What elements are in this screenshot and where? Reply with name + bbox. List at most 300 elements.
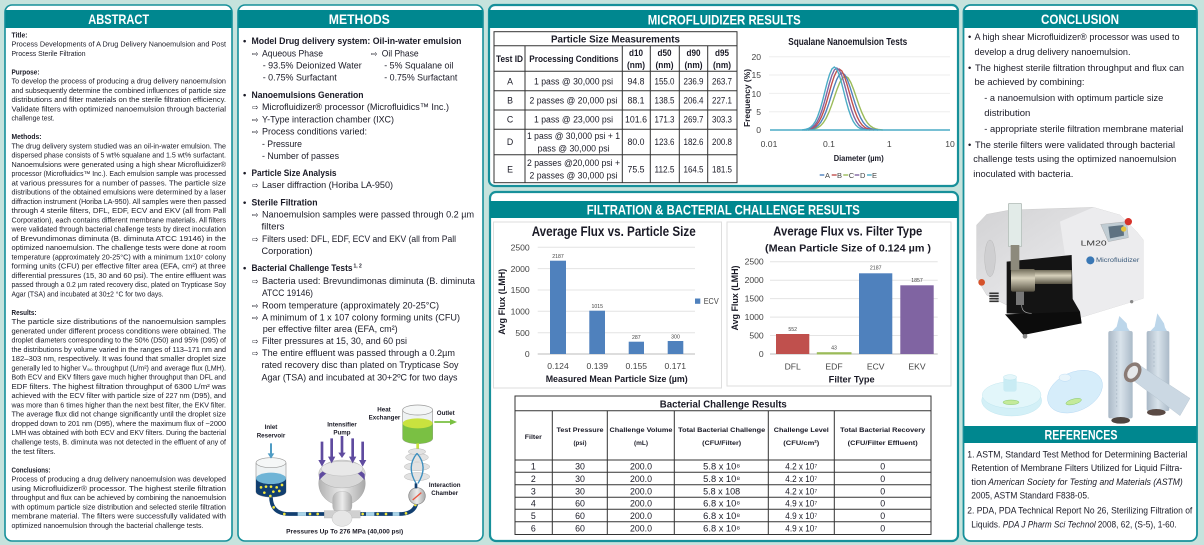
text block: methods list: - Number of passes	[262, 150, 339, 161]
text block: methods list: Model Drug delivery system: Oil-in-water emulsion	[252, 35, 462, 46]
text block: methods list: Nanoemulsion samples were passed through 0.2 µm	[262, 208, 474, 220]
chart legend: D	[860, 171, 866, 180]
text block: methods list: Oil Phase	[382, 48, 419, 58]
text block: conclusion bullets: challenge tests using the optimized nanoemulsion	[973, 153, 1176, 164]
chart: average flux vs particle size: 1015	[592, 304, 603, 310]
chart: average flux vs particle size: 500	[515, 328, 530, 338]
table: particle size measurements: 303.3	[712, 114, 732, 124]
chart: average flux vs filter type: Avg Flux (LMH)	[730, 266, 740, 330]
text block: abstract body: differential pressures (15, 30 and 60 psi). The entire effluent was	[12, 273, 227, 280]
text block: methods list: ⇨	[252, 235, 259, 244]
text block: abstract body: diffraction instrument (Horiba LA-950). All samples were then passed	[12, 199, 226, 206]
text block: methods list: Sterile Filtration	[252, 196, 318, 208]
panel: abstract	[5, 5, 232, 541]
text block: references: Liquids.	[971, 520, 1000, 530]
text block: abstract body: at various pressures for a number of passes. The particle size	[12, 180, 226, 187]
text block: abstract body: optimized nanoemulsion. The challenge tests were done at room	[12, 245, 226, 252]
table: bacterial challenge results: (mL)	[634, 440, 648, 447]
table: particle size measurements	[494, 32, 737, 183]
chart: squalane nanoemulsion tests	[743, 36, 955, 180]
table: bacterial challenge results: 0	[880, 524, 885, 534]
text block: conclusion bullets: The sterile filters were validated through bacterial	[975, 139, 1175, 150]
text block: methods list: ⇨	[252, 349, 259, 358]
text block: methods list: - 0.75% Surfactant	[263, 72, 337, 82]
text block: abstract body: EDF filters. The highest filtration throughput of 6300 L/m² was	[12, 384, 227, 391]
table: particle size measurements: 181.5	[712, 164, 732, 174]
text block: abstract body: and subsequently determine the combined influences of particle size	[12, 88, 226, 95]
text block: methods list: - 5% Squalane oil	[384, 60, 453, 70]
table: bacterial challenge results: 0	[880, 511, 885, 521]
chart: average flux vs filter type: DFL	[785, 361, 801, 371]
table: bacterial challenge results: 4.2 x 10⁷	[785, 486, 817, 496]
chart: average flux vs particle size: Measured Mean Particle Size (µm)	[546, 374, 688, 384]
table: particle size measurements: 263.7	[712, 76, 732, 86]
image: filter capsules and cartridges	[982, 313, 1190, 424]
text block: methods list: ⇨	[252, 210, 259, 220]
text block: methods list: Corporation)	[262, 245, 312, 256]
table: bacterial challenge results: 0	[880, 461, 885, 471]
text block: methods list: Bacteria used: Brevundimonas diminuta (B. diminuta	[262, 275, 476, 286]
text block: references: American Society for Testing and Materials (ASTM)	[987, 477, 1183, 487]
text block: abstract body: The particle size distributions of the nanoemulsion samples	[12, 319, 227, 326]
heading: methods: METHODS	[329, 11, 390, 27]
text block: references	[967, 450, 1193, 530]
text block: methods list: •	[243, 262, 246, 273]
text block: conclusion bullets: - a nanoemulsion with optimum particle size	[984, 92, 1163, 103]
chart: average flux vs particle size: 287	[632, 335, 641, 341]
text block: methods list: Nanoemulsions Generation	[252, 89, 364, 100]
text block: abstract body: Conclusions:	[12, 467, 50, 474]
table: particle size measurements: 112.5	[654, 164, 675, 174]
panel: filtration and bacterial challenge results	[490, 192, 958, 541]
text block: methods list: ⇨	[252, 50, 259, 58]
text block: abstract body: LMH was obtained with both ECV and EKV filters. During the bacterial	[12, 430, 226, 437]
table: bacterial challenge results: Total Bacterial Challenge	[678, 427, 765, 434]
chart: squalane nanoemulsion tests: 5	[756, 107, 761, 117]
text block: methods list: Particle Size Analysis	[252, 167, 336, 178]
table: particle size measurements: 164.5	[684, 164, 704, 174]
text block: conclusion bullets: develop a drug delivery nanoemulsion.	[974, 46, 1130, 57]
label: outlet: Outlet	[437, 410, 455, 417]
table: particle size measurements: 2 passes @20,000 psi +	[527, 158, 620, 168]
table: bacterial challenge results: 60	[575, 499, 585, 509]
table: bacterial challenge results: 4.9 x 10⁷	[785, 524, 817, 534]
text block: abstract body: optimized nanoemulsion through the bacterial challenge tests.	[12, 523, 204, 530]
chart: average flux vs particle size: 1500	[511, 285, 530, 295]
table: particle size measurements: (nm)	[713, 60, 731, 70]
table: particle size measurements: d50	[658, 48, 672, 58]
text block: references: 1. ASTM, Standard Test Method for Determining Bacterial	[967, 450, 1187, 460]
table: bacterial challenge results: 4.2 x 10⁷	[785, 461, 817, 471]
label: chamber: Chamber	[431, 490, 459, 497]
chart: average flux vs filter type	[727, 222, 951, 386]
chart: average flux vs particle size: 300	[671, 335, 680, 341]
text block: abstract body: passed through a 0.2 µm rated recovery disc, plated on Trypticase Soy	[12, 282, 226, 289]
table: bacterial challenge results: 200.0	[630, 486, 652, 496]
text block: abstract body: distributions and filter materials on the sterile filtration efficiency.	[12, 97, 226, 104]
chart: squalane nanoemulsion tests: 20	[751, 52, 761, 62]
label: pressures: Pressures Up To 276 MPa (40,000 psi)	[286, 528, 403, 536]
chart: squalane nanoemulsion tests: 0.1	[823, 139, 835, 149]
image: microfluidizer machine	[977, 203, 1143, 339]
table: particle size measurements: 88.1	[628, 96, 645, 106]
text block: abstract body: achieved with the ECV filter with particle size of 227 nm (D95), and	[12, 393, 226, 400]
chart: average flux vs filter type: ECV	[867, 361, 885, 371]
text block: methods list: - 93.5% Deionized Water	[263, 60, 362, 70]
table: bacterial challenge results: 3	[531, 486, 536, 496]
text block: abstract body: The drug delivery system studied was an oil-in-water emulsion. The	[12, 143, 226, 150]
table: bacterial challenge results: 6.8 x 10⁸	[703, 511, 741, 521]
chart: average flux vs filter type: 2187	[870, 266, 882, 272]
text block: methods list: Aqueous Phase	[262, 48, 323, 58]
table: bacterial challenge results: 0	[880, 486, 885, 496]
text block: abstract body: droplet diameters corresponding to the 50% (D50) and 95% (D95) of	[12, 338, 226, 345]
text block: methods list: Filters used: DFL, EDF, ECV and EKV (all from Pall	[262, 233, 456, 244]
chart: average flux vs particle size: ECV	[704, 296, 719, 306]
chart: average flux vs filter type: (Mean Particle Size of 0.124 µm )	[765, 242, 931, 254]
text block: conclusion bullets: •	[968, 62, 971, 73]
text block: methods list: ⇨	[252, 302, 259, 310]
text block: methods list: Filter pressures at 15, 30, and 60 psi	[262, 335, 407, 346]
table: bacterial challenge results: 1	[531, 461, 536, 471]
table: bacterial challenge results: Test Pressure	[556, 427, 604, 434]
text block: conclusion bullets	[968, 31, 1184, 179]
chart: average flux vs particle size: Average Flux vs. Particle Size	[532, 224, 696, 239]
text block: abstract body: Results:	[12, 310, 36, 317]
text block: methods list: per effective filter area (EFA, cm²)	[263, 323, 398, 334]
table: particle size measurements: Particle Size Measurements	[551, 34, 680, 45]
chart: average flux vs particle size: 0.139	[587, 361, 608, 371]
text block: methods list: 1, 2	[354, 264, 362, 270]
chart: average flux vs particle size: 0	[525, 349, 530, 359]
table: particle size measurements: 101.6	[625, 114, 647, 124]
table: particle size measurements: d90	[686, 48, 701, 58]
table: bacterial challenge results: 30	[575, 461, 585, 471]
table: bacterial challenge results: 5.8 x 10⁸	[703, 461, 741, 471]
text block: abstract body: Process of producing a drug delivery nanoemulsion was developed	[12, 476, 226, 484]
chart: average flux vs particle size: 1000	[511, 306, 530, 316]
text block: abstract body: challenge tests, B. diminuta was not detected in the effluent of any of	[12, 440, 226, 446]
text block: methods list: ⇨	[252, 314, 259, 322]
text block: abstract body: To develop the process of producing a drug delivery nanoemulsion	[12, 79, 226, 86]
text block: conclusion bullets: The highest sterile filtration throughput and flux can	[975, 62, 1184, 73]
table: bacterial challenge results: 200.0	[630, 474, 652, 484]
table: particle size measurements: d10	[629, 48, 643, 58]
text block: methods list: ⇨	[252, 103, 259, 112]
text block: abstract body: Purpose:	[12, 69, 40, 76]
text block: abstract body: generally led to higher V₉₀ throughput (L/m²) and average flux (LMH).	[12, 366, 226, 372]
chart legend	[820, 171, 877, 180]
label: Microfluidizer logo: Microfluidizer	[1096, 258, 1139, 264]
table: particle size measurements: (nm)	[656, 60, 674, 70]
label: LM20: LM20	[1081, 238, 1107, 247]
table: particle size measurements: 2 passes @ 20,000 psi	[530, 96, 618, 106]
table: bacterial challenge results: Total Bacterial Recovery	[840, 427, 925, 434]
table: particle size measurements: 75.5	[628, 164, 645, 174]
text block: abstract body: Corporation), each contains different membrane materials. All filters	[12, 217, 227, 224]
text block: abstract body: the distributions by volume varied in the ranges of 113–171 nm and	[12, 347, 226, 354]
text block: methods list: •	[243, 167, 246, 178]
table: particle size measurements: 200.8	[712, 137, 732, 147]
table: bacterial challenge results: Challenge Level	[774, 427, 829, 434]
chart: average flux vs filter type: EKV	[908, 361, 926, 371]
chart: squalane nanoemulsion tests: 10	[945, 139, 955, 149]
chart legend: E	[872, 171, 877, 180]
text block: methods list: ⇨	[252, 128, 259, 136]
text block: methods list: ATCC 19146)	[262, 287, 313, 298]
chart: average flux vs filter type: 1500	[745, 294, 764, 304]
table: bacterial challenge results: 0	[880, 474, 885, 484]
table: bacterial challenge results: 2	[531, 474, 536, 484]
text block: abstract body	[10, 32, 227, 530]
table: bacterial challenge results: 200.0	[630, 461, 652, 471]
text block: abstract body: Title:	[12, 32, 28, 39]
table: bacterial challenge results: 200.0	[630, 499, 652, 509]
chart legend: B	[837, 171, 842, 180]
table: particle size measurements: 1 pass @ 30,000 psi	[534, 76, 613, 86]
chart: average flux vs particle size: 0.171	[665, 361, 686, 371]
text block: abstract body: was more than 6 times higher than the next best filter, the EKV filter.	[10, 402, 226, 410]
table: bacterial challenge results: 200.0	[630, 511, 652, 521]
heading: filtration results: FILTRATION & BACTERIAL CHALLENGE RESULTS	[587, 202, 860, 218]
chart: average flux vs particle size: 0.124	[547, 361, 569, 371]
label: intensifier pump: Intensifier	[327, 422, 357, 428]
text block: methods list: ⇨	[252, 337, 259, 346]
table: particle size measurements: 269.7	[684, 114, 704, 124]
text block: abstract body: Both ECV and EKV filters gave much higher throughput than DFL and	[12, 375, 226, 382]
table: particle size measurements: 182.6	[684, 137, 704, 147]
chart: average flux vs filter type: 43	[831, 346, 837, 352]
text block: references: tion	[971, 477, 986, 487]
table: particle size measurements: B	[507, 96, 513, 106]
chart: average flux vs filter type: 500	[749, 330, 764, 340]
chart: squalane nanoemulsion tests: 15	[751, 70, 761, 80]
text block: abstract body: using Microfluidizer® processor. The highest sterile filtration	[12, 485, 226, 493]
text block: methods list: - Pressure	[262, 138, 302, 149]
label: interaction: Interaction	[429, 482, 461, 489]
text block: abstract body: Methods:	[12, 134, 42, 141]
text block: abstract body: challenge test.	[12, 116, 55, 123]
table: particle size measurements: 138.5	[654, 96, 675, 106]
text block: abstract body: Agar (TSA) and incubated at 30±2 °C for two days.	[12, 290, 164, 298]
text block: conclusion bullets: distribution	[984, 107, 1030, 118]
diagram: microfluidizer process	[256, 405, 461, 536]
text block: methods list: rated recovery disc than plated on Trypticase Soy	[262, 359, 459, 370]
chart: average flux vs filter type: Average Flux vs. Filter Type	[773, 224, 922, 238]
table: particle size measurements: pass @ 30,000 psi	[538, 144, 610, 154]
chart: squalane nanoemulsion tests: 1	[887, 139, 892, 149]
table: particle size measurements: 236.9	[684, 76, 704, 86]
text block: methods list: •	[243, 89, 246, 100]
text block: methods list: Y-Type interaction chamber (IXC)	[262, 114, 394, 124]
text block: conclusion bullets: be achieved by combining:	[974, 76, 1084, 87]
text block: methods list: Bacterial Challenge Tests	[252, 262, 352, 273]
table: bacterial challenge results: 6	[531, 524, 536, 534]
text block: methods list: ⇨	[252, 116, 259, 124]
text block: methods list: Laser diffraction (Horiba LA-950)	[262, 179, 393, 190]
text block: abstract body: temperature (approximately 20-25°C) with a minimum 1x10⁷ colony	[12, 253, 227, 261]
table: particle size measurements: 80.0	[628, 137, 645, 147]
table: particle size measurements: A	[507, 76, 513, 86]
table: bacterial challenge results: Bacterial Challenge Results	[660, 399, 787, 410]
table: bacterial challenge results: 30	[575, 474, 585, 484]
chart: squalane nanoemulsion tests: 0	[756, 125, 761, 135]
table: particle size measurements: 123.6	[654, 137, 675, 147]
chart: average flux vs particle size: 2187	[552, 254, 564, 260]
text block: abstract body: of Brevundimonas diminuta (B. diminuta ATCC 19146) in the	[12, 236, 226, 243]
text block: abstract body: throughput and flux can be achieved by combining the nanoemulsion	[12, 495, 226, 502]
text block: abstract body: generated under different process conditions were obtained. The	[12, 328, 226, 335]
text block: abstract body: the test filters.	[12, 449, 56, 456]
chart: average flux vs filter type: 0	[759, 349, 764, 359]
table: particle size measurements: E	[507, 164, 513, 174]
text block: methods list: ⇨	[252, 277, 259, 286]
table: particle size measurements: 227.1	[712, 96, 732, 106]
chart: squalane nanoemulsion tests: Diameter (µm)	[834, 154, 884, 163]
table: particle size measurements: 171.3	[654, 114, 675, 124]
text block: methods list: Microfluidizer® processor (Microfluidics™ Inc.)	[262, 101, 449, 112]
table: bacterial challenge results: 4.2 x 10⁷	[785, 474, 817, 484]
label: pump: Pump	[333, 430, 351, 436]
text block: abstract body: with optimum particle size distribution and selected sterile filtration	[10, 504, 226, 511]
text block: methods list: •	[243, 35, 246, 46]
table: bacterial challenge results: 5	[531, 511, 536, 521]
text block: abstract body: 182–303 nm, respectively. It was found that smaller droplet size	[12, 356, 226, 363]
text block: abstract body: Process Sterile Filtration	[12, 51, 86, 58]
table: particle size measurements: Test ID	[496, 54, 523, 64]
table: bacterial challenge results: 30	[575, 486, 585, 496]
heading: references	[964, 426, 1196, 443]
text block: abstract body: processor (Microfluidics™ Inc.). Each emulsion sample was processed	[12, 171, 226, 178]
panel: conclusion and references	[964, 5, 1197, 541]
table: bacterial challenge results: (psi)	[574, 440, 586, 447]
table: bacterial challenge results: 4	[531, 499, 536, 509]
chart: average flux vs particle size: 2500	[511, 242, 530, 252]
table: bacterial challenge results: 4.9 x 10⁷	[785, 511, 817, 521]
text block: abstract body: were validated through bacterial challenge tests by direct inoculation	[10, 227, 226, 234]
text block: methods list: •	[243, 196, 246, 208]
chart: squalane nanoemulsion tests: Frequency (%)	[743, 69, 752, 127]
table: particle size measurements: (nm)	[684, 60, 703, 70]
table: particle size measurements: 1 pass @ 30,000 psi + 1	[527, 131, 620, 141]
table: bacterial challenge results: 5.8 x 10⁸	[703, 474, 741, 484]
table: bacterial challenge results: 4.9 x 10⁷	[785, 499, 817, 509]
panel: methods	[238, 5, 483, 541]
text block: methods list: filters	[262, 220, 285, 232]
chart: squalane nanoemulsion tests: 0.01	[761, 139, 778, 149]
table: particle size measurements: 94.8	[628, 76, 645, 86]
table: particle size measurements: 1 pass @ 23,000 psi	[534, 114, 613, 124]
table: bacterial challenge results: (CFU/cm²)	[783, 440, 819, 447]
text block: abstract body: membrane material. The filters were successfully validated with	[12, 514, 226, 520]
chart: average flux vs filter type: 1000	[745, 312, 764, 322]
table: particle size measurements: 206.4	[684, 96, 704, 106]
chart: average flux vs filter type: Filter Type	[829, 374, 875, 384]
table: bacterial challenge results: Challenge Volume	[610, 427, 673, 434]
table: bacterial challenge results: Filter	[525, 434, 542, 441]
text block: conclusion bullets: A high shear Microfluidizer® processor was used to	[974, 31, 1180, 42]
panel: microfluidizer results	[489, 5, 958, 186]
chart: average flux vs filter type: 2000	[745, 275, 764, 285]
text block: references: PDA J Pharm Sci Technol	[1003, 520, 1097, 530]
table: bacterial challenge results: 6.8 x 10⁸	[703, 499, 741, 509]
heading: references: REFERENCES	[1044, 426, 1118, 442]
text block: methods list: Agar (TSA) and incubated at 30+2ºC for two days	[262, 372, 458, 382]
text block: methods list: Process conditions varied:	[262, 126, 367, 136]
text block: abstract body: Process Developments of A Drug Delivery Nanoemulsion and Post	[12, 42, 226, 49]
chart: average flux vs filter type: 552	[788, 327, 797, 333]
table: bacterial challenge results	[515, 396, 931, 534]
text block: abstract body: forming units (CFU) per effective filter area (EFA, cm²) at three	[12, 264, 226, 271]
label: inlet reservoir: Inlet	[265, 424, 277, 431]
heading: microfluidizer results: MICROFLUIDIZER RESULTS	[648, 12, 801, 28]
table: bacterial challenge results: (CFU/Filter Effluent)	[848, 440, 918, 447]
text block: methods list: - 0.75% Surfactant	[384, 72, 458, 82]
text block: abstract body: Nanoemulsions were generated using a high shear Microfluidizer®	[12, 161, 227, 169]
text block: conclusion bullets: •	[968, 139, 971, 150]
text block: abstract body: Validate filters with optimized nanoemulsion through bacterial	[12, 106, 226, 113]
table: bacterial challenge results: 0	[880, 499, 885, 509]
label: reservoir: Reservoir	[257, 432, 286, 440]
text block: conclusion bullets: - appropriate sterile filtration membrane material	[984, 123, 1183, 134]
text block: conclusion bullets: inoculated with bacteria.	[973, 168, 1073, 179]
label: exchanger: Exchanger	[369, 414, 401, 422]
text block: methods list: ⇨	[252, 181, 259, 190]
text block: methods list: A minimum of 1 x 107 colony forming units (CFU)	[262, 312, 460, 322]
chart legend: A	[825, 171, 830, 180]
heading: abstract: ABSTRACT	[88, 11, 150, 27]
table: particle size measurements: Processing Conditions	[529, 54, 619, 64]
chart: average flux vs particle size	[494, 222, 722, 388]
chart: average flux vs filter type: EDF	[825, 361, 843, 371]
table: particle size measurements: C	[507, 114, 514, 124]
table: bacterial challenge results: 60	[575, 511, 585, 521]
heading: conclusion: CONCLUSION	[1041, 11, 1119, 27]
text block: abstract body: distributions of the obtained emulsions were determined by a laser	[12, 190, 227, 197]
table: particle size measurements: D	[507, 137, 513, 147]
table: bacterial challenge results: 60	[575, 524, 585, 534]
chart: average flux vs particle size: Avg Flux (LMH)	[497, 269, 507, 335]
table: bacterial challenge results: 6.8 x 10⁸	[703, 524, 741, 534]
label: heat: Heat	[377, 406, 391, 414]
text block: references: Retention of Membrane Filters Utilized for Liquid Filtra-	[971, 463, 1182, 473]
text block: methods list: The entire effluent was passed through a 0.2µm	[262, 347, 455, 358]
table: bacterial challenge results: (CFU/Filter)	[702, 440, 741, 447]
text block: abstract body: The average flux did not change significantly until the droplet size	[12, 412, 226, 419]
chart: squalane nanoemulsion tests: Squalane Nanoemulsion Tests	[788, 36, 907, 48]
chart: average flux vs filter type: 2500	[745, 256, 764, 266]
chart: average flux vs particle size: 0.155	[626, 361, 647, 371]
table: bacterial challenge results: 200.0	[630, 524, 652, 534]
table: particle size measurements: (nm)	[627, 60, 645, 70]
text block: abstract body: dispersed phase consists of 5 wt% squalane and 1.5 wt% surfactant.	[12, 153, 226, 160]
table: particle size measurements: 2 passes @ 30,000 psi	[530, 170, 618, 180]
text block: abstract body: through 4 sterile filters, DFL, EDF, ECV and EKV (all from Pall	[12, 208, 226, 215]
chart: average flux vs particle size: 2000	[511, 264, 530, 274]
text block: methods list	[243, 35, 476, 382]
text block: methods list: Room temperature (approximately 20-25°C)	[262, 300, 439, 310]
text block: methods list: ⇨	[371, 50, 378, 58]
chart: average flux vs filter type: 1857	[911, 278, 923, 284]
chart legend: C	[849, 171, 855, 180]
chart: squalane nanoemulsion tests: 10	[751, 89, 761, 99]
table: particle size measurements: d95	[715, 48, 729, 58]
text block: references: 2008, 62, (S-5), 1-60.	[1098, 520, 1177, 530]
table: bacterial challenge results: 5.8 x 108	[703, 486, 740, 496]
text block: references: 2005, ASTM Standard F838-05.	[971, 490, 1089, 500]
table: particle size measurements: 155.0	[654, 76, 675, 86]
text block: references: 2. PDA, PDA Technical Report No 26, Sterilizing Filtration of	[967, 506, 1193, 516]
